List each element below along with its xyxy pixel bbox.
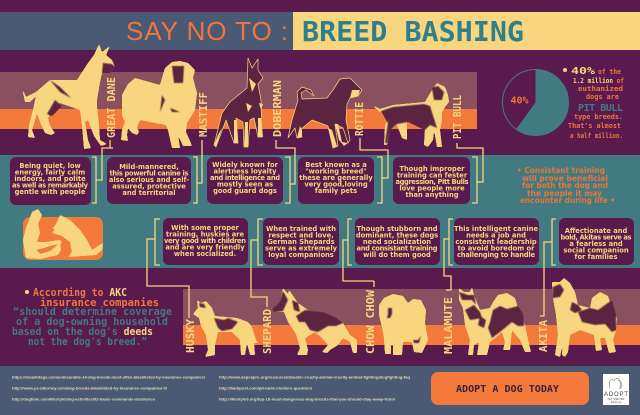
dog: husky (193, 300, 258, 357)
caption: pit bull: love people more (399, 184, 465, 192)
stat text: 40 percent euthanized: PIT BULL (578, 103, 623, 114)
caption: pit bull (393, 157, 470, 204)
connector lines bottom (147, 219, 556, 318)
caption: great dane: gentle with people (15, 188, 86, 196)
dog: chow chow (379, 294, 428, 355)
dog: malamute (459, 287, 531, 355)
stat text: 40 percent euthanized: That's almost (568, 122, 621, 130)
callout: consistant training: • Consistant training (517, 166, 605, 175)
caption: shepard (263, 218, 339, 265)
title banner (0, 12, 640, 50)
stat text: 40 percent euthanized: of the (598, 68, 621, 76)
caption: great dane: Being quiet, low (19, 162, 81, 170)
caption: shepard: When trained with (266, 225, 336, 233)
caption: pit bull: than anything (406, 191, 459, 199)
pie chart: 40 percent (502, 70, 568, 136)
logo: adopt: adopt.org (611, 401, 622, 404)
sources links: http://barkpost.com/pit-bulls-shelters-question/ (219, 386, 312, 390)
stat text: 40 percent euthanized: type breeds. (574, 113, 623, 121)
caption: great dane: energy, fairly calm (15, 168, 85, 176)
stat text: 40 percent euthanized: dogs are (586, 93, 619, 101)
breed labels top (105, 77, 464, 139)
caption: great dane: indoors, and polite (14, 175, 86, 183)
caption: mastiff: Mild-mannered, (119, 163, 179, 171)
dog: akita (552, 278, 617, 357)
callout: consistant training: will prove beneficial (522, 174, 608, 183)
stat text: 40 percent euthanized: a half million. (570, 132, 623, 140)
caption: husky: With some proper (171, 224, 240, 232)
dog: pit bull (372, 83, 449, 147)
caption: husky: when socialized. (174, 250, 236, 258)
dog: rottie (288, 78, 362, 148)
sources links: http://www.aspcapro.org/resource/disaster-cruelty-animal-cruelty-animal-fighting/dogfighting-faq (219, 376, 410, 380)
caption: rottie: very good,loving (304, 180, 368, 188)
stat text: 40 percent euthanized (563, 66, 624, 140)
dog: shepard (272, 288, 357, 355)
callout: consistant training: the people it may (527, 189, 603, 198)
caption: malamute: needs a job and (466, 232, 526, 240)
dog: doberman (214, 58, 263, 147)
caption: akita: Affectionate and (565, 227, 627, 235)
callout: consistant training: for both the dog and (522, 181, 608, 190)
label: doberman: DOBERMAN (271, 80, 284, 137)
caption: shepard: serve as extremely (265, 244, 338, 252)
caption: pit bull: training can fester (397, 172, 468, 180)
caption: chow chow: will do them good (363, 251, 431, 259)
callout: consistant training: encounter during life • (520, 196, 615, 205)
caption: malamute: challenging to handle (457, 251, 535, 259)
caption: doberman: mostly seen as (217, 180, 273, 188)
caption: mastiff: also serious and self- (109, 176, 189, 184)
caption: doberman: and intelligence and (210, 174, 280, 182)
caption: shepard: German Shepards (267, 238, 335, 246)
sources links: http://dogtime.com/lifestyle/dog-activities/92-basic-commands-obedience (12, 398, 155, 402)
caption: malamute: consistent leadership (455, 238, 537, 246)
caption: rottie: "working breed" (305, 168, 367, 176)
caption: great dane (10, 157, 91, 205)
label: pit bull: PIT BULL (451, 95, 464, 139)
caption: rottie (298, 157, 374, 204)
sources links (12, 376, 410, 402)
caption: rottie: these are generally (299, 174, 373, 182)
caption: akita: social companion (563, 246, 629, 254)
caption: great dane: as well as remarkably (12, 182, 89, 190)
callout: consistant training (517, 166, 615, 205)
insurance quote: insurance companies (40, 296, 159, 309)
logo: adopt: ADOPT (604, 392, 628, 398)
button: adopt a dog today: ADOPT A DOG TODAY (456, 384, 559, 395)
connector lines top (92, 138, 483, 203)
caption: chow chow: Though stubborn and (356, 225, 438, 233)
dog: great dane (22, 44, 115, 149)
pie label: 40% (510, 96, 529, 106)
caption: husky: very good with children (164, 237, 246, 245)
caption: chow chow (355, 218, 440, 265)
caption: malamute: This intelligent canine (454, 225, 538, 233)
caption: husky: training, huskies are (166, 230, 245, 238)
caption: mastiff: and territorial (122, 189, 176, 197)
caption: malamute: to avoid boredom or (458, 244, 535, 252)
caption: mastiff: assured, protective (112, 182, 186, 190)
caption: husky: and are very friendly (165, 244, 245, 252)
caption: mastiff: this powerful canine is (110, 170, 189, 178)
caption: husky (163, 218, 248, 265)
label: akita: AKITA (537, 320, 550, 352)
insurance quote: “should determine coverage (13, 305, 172, 318)
logo: adopt (603, 374, 629, 405)
caption: pit bull: Though improper (399, 165, 465, 173)
label: great dane: GREAT DANE (105, 77, 118, 138)
caption: malamute (454, 218, 539, 265)
label: husky: HUSKY (184, 319, 197, 353)
insurance quote: of a dog-owning household (16, 315, 168, 328)
caption: doberman: Widely known for (212, 161, 279, 169)
title: say no to: SAY NO TO : (126, 16, 288, 46)
caption: doberman: good guard dogs (213, 187, 277, 195)
label: shepard: SHEPARD (261, 309, 274, 354)
button: adopt a dog today (431, 372, 589, 405)
caption: shepard: respect and love, (268, 232, 334, 240)
insurance quote: not the dog's breed.” (28, 335, 147, 348)
caption: chow chow: dominant, these dogs (356, 232, 438, 240)
stat text: 40 percent euthanized: euthanized (578, 85, 623, 93)
caption: pit bull: aggression, Pitt Bulls (396, 178, 469, 186)
title: breed bashing: BREED BASHING (302, 15, 524, 48)
insurance quote: According to AKC (33, 286, 127, 299)
stat text: 40 percent euthanized: 40% (571, 66, 595, 77)
logo: adopt: PET SHELTER (608, 398, 625, 401)
stat text: 40 percent euthanized: 1.2 million of (573, 77, 624, 85)
breed labels bottom (184, 290, 550, 354)
caption: rottie: Best known as a (305, 161, 367, 169)
label: mastiff: MASTIFF (197, 92, 210, 137)
icon: person and dog (23, 209, 103, 260)
caption: doberman (207, 157, 283, 204)
caption: akita: bold, Akitas serve as (560, 234, 632, 242)
label: malamute: MALAMUTE (442, 297, 455, 354)
caption: chow chow: need socialization (363, 238, 431, 246)
sources links: https://moarkdogs.com/uninsurable-14-dog-breeds-most-often-blacklisted-by-insurance-companies/ (12, 376, 205, 380)
caption: doberman: alertness loyalty (213, 168, 277, 176)
insurance quote (12, 286, 172, 348)
label: chow chow: CHOW CHOW (364, 290, 377, 354)
caption: mastiff (107, 157, 191, 204)
dog: mastiff (121, 61, 197, 148)
label: rottie: ROTTIE (353, 102, 366, 136)
caption: akita: for families (575, 253, 617, 261)
caption: akita (559, 218, 634, 265)
caption: rottie: family pets (315, 187, 357, 195)
caption: shepard: loyal companions (268, 251, 334, 259)
sources links: http://lifestyle9.org/top-10-most-dangerous-dog-breeds-that-you-should-stay-away-from/ (219, 398, 395, 402)
insurance quote: based on the dog's deeds (12, 325, 153, 338)
caption: akita: a fearless and (569, 240, 623, 248)
sources links: http://www.pc-attorney.com/dog-breeds-blacklisted-by-insurance-companies-5/ (12, 386, 167, 390)
caption: chow chow: and consistant training (356, 244, 438, 252)
